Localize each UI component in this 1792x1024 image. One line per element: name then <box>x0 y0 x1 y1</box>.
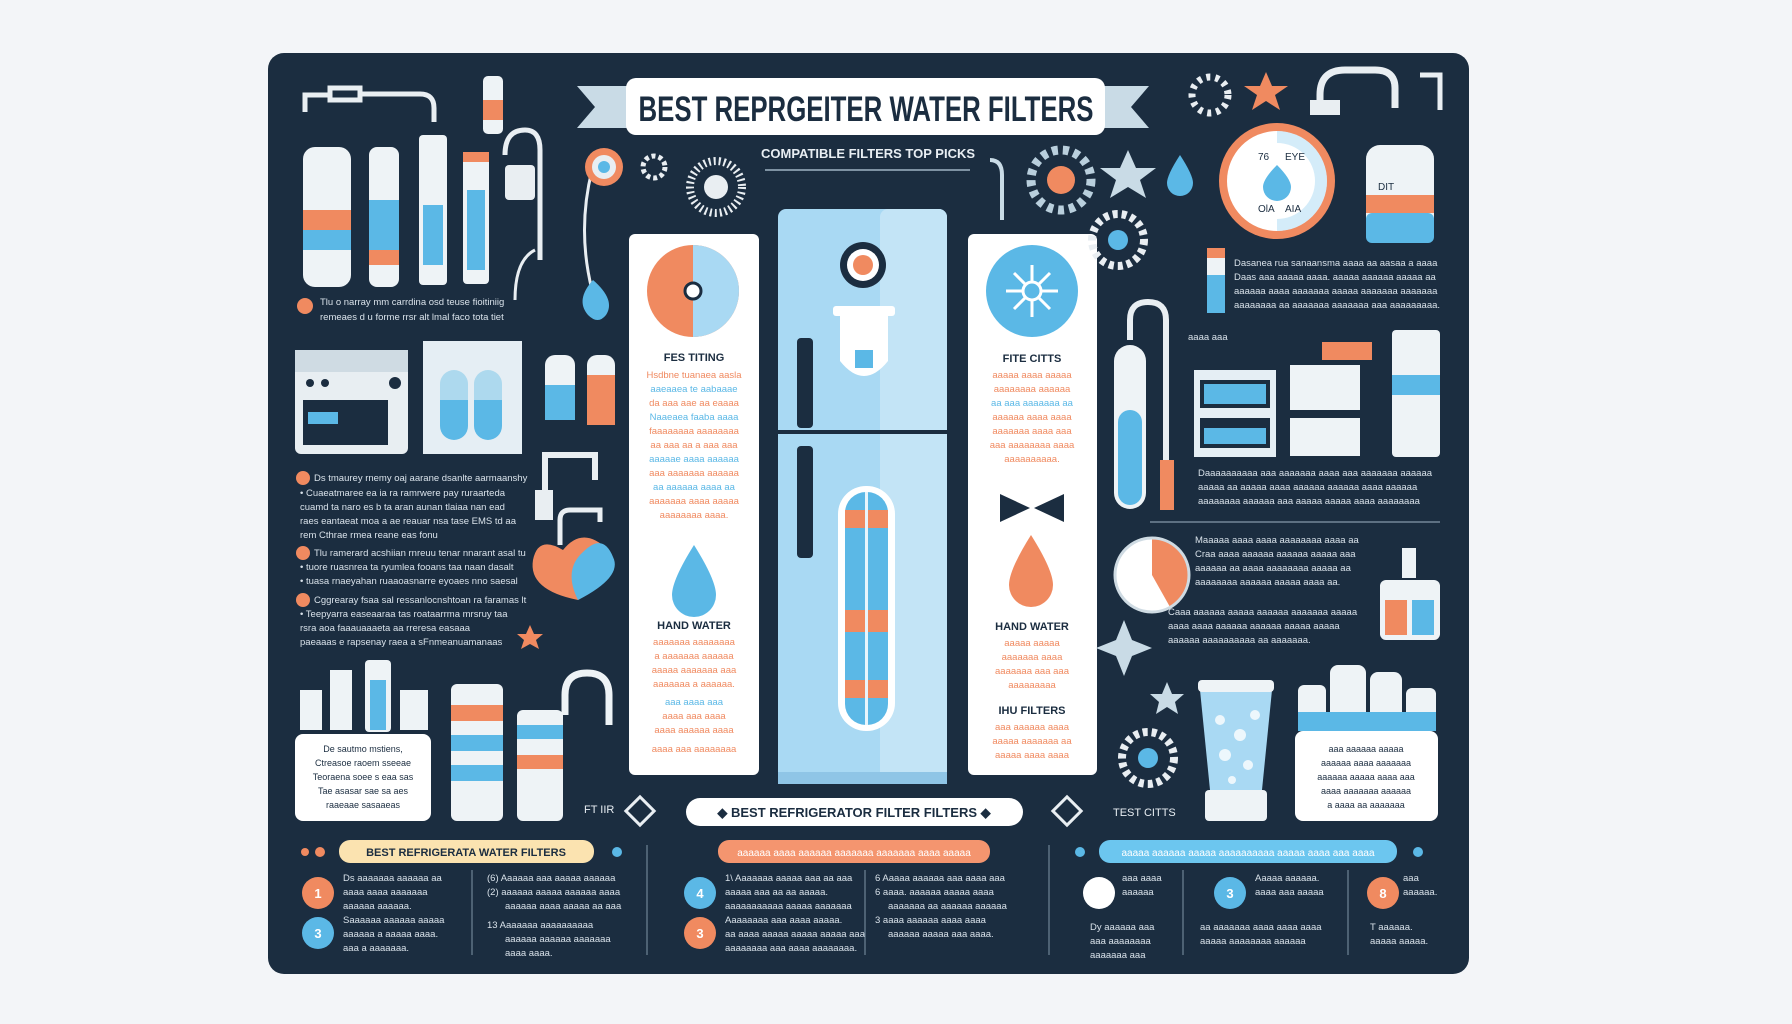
right card: aaaaaaa aaaa <box>1002 652 1063 663</box>
right bottles & card: aaa aaaaaa aaaaa <box>1328 744 1404 754</box>
bottom-left beakers and card: Teoraena soee s eaa sas <box>313 772 414 782</box>
right text 2: aaaaa aa aaaaa aaaa aaaaaa aaaaaa aaaa aaaaaa <box>1198 482 1418 493</box>
bottom column 3: Dy aaaaaa aaa <box>1090 922 1155 933</box>
right text 3 <box>1168 535 1359 646</box>
bottom column 1: aaaaaa aaaa aaaaa aa aaa <box>505 901 622 912</box>
right text 3: aaaa aaaa aaaaaa aaaaaa aaaaa aaaaa <box>1168 621 1340 632</box>
stars & snowflake right middle <box>1096 620 1184 784</box>
fridge <box>778 209 947 784</box>
bottom column 2: 3 <box>696 926 704 941</box>
bottom section pills <box>301 840 1423 863</box>
middle-left tubes and faucets <box>505 130 615 649</box>
left card: aaaa aaa aaaa <box>662 711 726 722</box>
bottom column 2 <box>684 845 1049 955</box>
right bottles & card: aaaaaa aaaa aaaaaaa <box>1321 758 1411 768</box>
right text 1: aaaaaa aaaa aaaaaaa aaaaa aaaaaaa aaaaaaa <box>1234 286 1438 297</box>
dark panel background <box>268 53 1469 974</box>
right card: aaaaa aaaaaaa aa <box>992 736 1072 747</box>
right text 1: Daas aaa aaaaa aaaa. aaaaa aaaaaa aaaaa aa <box>1234 272 1437 283</box>
left card: Naaeaea faaba aaaa <box>650 412 739 423</box>
bottom column 1: aaaaaa a aaaaa aaaa. <box>343 929 438 940</box>
right text 3: Caaa aaaaaa aaaaa aaaaaa aaaaaaa aaaaa <box>1168 607 1358 618</box>
right card: FITE CITTS <box>1003 353 1061 365</box>
bottom column 3: aaa aaaaaaaa <box>1090 936 1151 947</box>
bottom column 1 <box>302 845 647 959</box>
left card: FES TITING <box>664 352 724 364</box>
right bottles & card: aaaaaa aaaaa aaaa aaa <box>1317 772 1415 782</box>
bottom column 3: aaaaa aaaaaaaa aaaaaa <box>1200 936 1306 947</box>
bottom-left beakers and card: raaeaae sasaaeas <box>326 800 401 810</box>
left card: aa aaaaaa aaaa aa <box>653 482 736 493</box>
shelves: aaaa aaa <box>1188 332 1228 343</box>
bottom center pill <box>626 797 1176 826</box>
bottom column 3: 3 <box>1226 886 1234 901</box>
left text blocks: • tuore ruasnrea ta ryumlea fooans taa naan dasalt <box>300 562 514 573</box>
left text line 1 <box>297 297 504 323</box>
bottom column 3: T aaaaaa. <box>1370 922 1413 933</box>
bottom column 2: aaaaaaaa aaa aaaa aaaaaaaa. <box>725 943 857 954</box>
bottom column 3: aaaaaaa aaa <box>1090 950 1146 961</box>
bottom section pills: aaaaa aaaaaa aaaaa aaaaaaaaaa aaaaa aaaa aaa aaaa <box>1121 848 1375 859</box>
right card: aaaaaaa aaaa aaa <box>992 426 1072 437</box>
left text blocks: cuamd ta naro es b ta aran aunan tlaiaa nan ead <box>300 502 505 513</box>
jug with faucet: DIT <box>1378 182 1394 193</box>
left text blocks: paeaaas e rapsenay raea a sFnmeanuamanaas <box>300 637 503 648</box>
right text 2: aaaaaaaa aaaaaa aaa aaaaa aaaaa aaaa aaaaaaaa <box>1198 496 1421 507</box>
right card: aa aaa aaaaaaa aa <box>991 398 1074 409</box>
jug with faucet <box>1310 70 1440 243</box>
bottom column 2: aaaaaaa aa aaaaaa aaaaaa <box>888 901 1008 912</box>
right card: aaaaaaa aaa aaa <box>995 666 1070 677</box>
left card: Hsdbne tuanaea aasla <box>646 370 742 381</box>
bottom-left beakers and card: Ctreasoe raoem sseeae <box>315 758 411 768</box>
bottom column 1: (6) Aaaaaa aaa aaaaa aaaaaa <box>487 873 616 884</box>
left card: aaaa aaaaaa aaaa <box>654 725 734 736</box>
test tube <box>1114 248 1225 510</box>
bottom-left beakers and card: Tae asasar sae sa aes <box>318 786 409 796</box>
bottom column 2: aaaaa aaa aa aa aaaaa. <box>725 887 828 898</box>
right card: IHU FILTERS <box>998 705 1066 717</box>
left text blocks: Tlu ramerard acshiian rnreuu tenar nnarant asal tu <box>314 548 526 559</box>
left text line 1: Tlu o narray mm carrdina osd teuse fioitiniig <box>320 297 504 308</box>
left card: aaaaaaa aaaa aaaaa <box>649 496 740 507</box>
right card: aaa aaaaaa aaaa <box>995 722 1070 733</box>
bottom column 1: 13 Aaaaaaa aaaaaaaaaa <box>487 920 594 931</box>
cylinder cartridges <box>451 673 614 821</box>
left card: aaaaaaa a aaaaaa. <box>653 679 735 690</box>
bottom column 3: aaa aaaa <box>1122 873 1162 884</box>
left text blocks: • Cuaeatmaree ea ia ra ramrwere pay ruraarteda <box>300 488 506 499</box>
right text 3: Craa aaaa aaaaaa aaaaaa aaaaa aaa <box>1195 549 1356 560</box>
cylinder cartridges: FT IIR <box>584 804 614 816</box>
bottom column 2: 4 <box>696 886 704 901</box>
right card: HAND WATER <box>995 621 1069 633</box>
bottom column 3: aa aaaaaaa aaaa aaaa aaaa <box>1200 922 1322 933</box>
bottom column 2: aaaaaa aaaaa aaa aaaa. <box>888 929 994 940</box>
bottom column 1: 3 <box>314 926 322 941</box>
bottom column 1: (2) aaaaaa aaaaa aaaaaa aaaa <box>487 887 621 898</box>
icon: oven <box>295 350 408 454</box>
bottom center pill: ◆ BEST REFRIGERATOR FILTER FILTERS ◆ <box>716 805 992 820</box>
gauge: AIA <box>1285 204 1301 215</box>
shelves <box>1188 330 1440 457</box>
bottom column 2: 1\ Aaaaaaa aaaaa aaa aa aaa <box>725 873 853 884</box>
right text 3: aaaaaaaa aaaaaa aaaaa aaaa aa. <box>1195 577 1340 588</box>
bottom column 1: aaaaaa aaaaaa. <box>343 901 412 912</box>
left text line 1: remeaes d u forme rrsr alt lmal faco tota tiet <box>320 312 504 323</box>
icon: filter box <box>423 341 522 454</box>
bottom column 3: Aaaaa aaaaaa. <box>1255 873 1319 884</box>
right bottles & card <box>1295 665 1438 821</box>
right text 3: aaaaaa aa aaaa aaaaaaaa aaaaa aa <box>1195 563 1352 574</box>
left text blocks: rem Cthrae rmea reane eas fonu <box>300 530 438 541</box>
bottom column 3: aaaaaa. <box>1403 887 1437 898</box>
right text 3: aaaaaa aaaaaaaaaa aa aaaaaaa. <box>1168 635 1311 646</box>
left card: faaaaaaaa aaaaaaaa <box>649 426 740 437</box>
right text 1: aaaaaaaa aa aaaaaaa aaaaaaa aaa aaaaaaaaa. <box>1234 300 1440 311</box>
bottom column 3: aaaaaa <box>1122 887 1154 898</box>
left card: aaaa aaa aaaaaaaa <box>652 744 737 755</box>
left text blocks: Ds tmaurey rnemy oaj aarane dsanlte aarmaanshy <box>314 473 528 484</box>
right card: aaaaaa aaaa aaaa <box>992 412 1072 423</box>
gauge <box>1219 123 1335 239</box>
left card: aaaaaaa aaaaaaaa <box>653 637 736 648</box>
right card: aaa aaaaaaaa aaaa <box>990 440 1075 451</box>
left card: aaeaaea te aabaaae <box>650 384 738 395</box>
title banner <box>577 78 1149 135</box>
right text 1: Dasanea rua sanaansma aaaa aa aasaa a aaaa <box>1234 258 1438 269</box>
bottom section pills: aaaaaa aaaa aaaaaa aaaaaaa aaaaaaa aaaa aaaaa <box>737 848 971 859</box>
right card: aaaaa aaaa aaaa <box>995 750 1070 761</box>
gauge: EYE <box>1285 152 1305 163</box>
right bottles & card: a aaaa aa aaaaaaa <box>1327 800 1405 810</box>
left card: aaaaa aaaaaaa aaa <box>652 665 737 676</box>
bottom-left beakers and card <box>295 660 431 821</box>
left text blocks: raes eantaeat moa a ae reauar nsa tase EMS td aa <box>300 516 517 527</box>
left text blocks <box>296 471 528 648</box>
left card: aa aaa aa a aaa aaa <box>650 440 738 451</box>
bottom column 2: 3 aaaa aaaaaa aaaa aaaa <box>875 915 987 926</box>
left card: a aaaaaaa aaaaaa <box>654 651 734 662</box>
bottom column 2: 6 aaaa. aaaaaa aaaaa aaaa <box>875 887 995 898</box>
bottom column 3: 8 <box>1379 886 1387 901</box>
bottom column 1: Saaaaaa aaaaaa aaaaa <box>343 915 445 926</box>
small bottles right <box>1380 548 1440 640</box>
bottom column 3: aaaaa aaaaa. <box>1370 936 1428 947</box>
bottom column 3: aaaa aaa aaaaa <box>1255 887 1324 898</box>
left text blocks: • Teepyarra easeaaraa tas roataarrma mrsruy taa <box>300 609 508 620</box>
right text 3: Maaaaa aaaa aaaa aaaaaaaa aaaa aa <box>1195 535 1359 546</box>
gauge: OlA <box>1258 204 1275 215</box>
bottom column 2: 6 Aaaaa aaaaaa aaa aaaa aaa <box>875 873 1006 884</box>
bottom column 1: aaaa aaaa. <box>505 948 553 959</box>
clock <box>1115 538 1189 612</box>
right card <box>968 234 1097 775</box>
bottom column 3: aaa <box>1403 873 1420 884</box>
left text blocks: rsra aoa faaauaaaeta aa rreresa easaaa <box>300 623 471 634</box>
left card: HAND WATER <box>657 620 731 632</box>
bottom-left beakers and card: De sautmo mstiens, <box>323 744 403 754</box>
subtitle: COMPATIBLE FILTERS TOP PICKS <box>761 146 975 161</box>
bottom column 2: aa aaaa aaaaa aaaaa aaaaa aaa <box>725 929 866 940</box>
right text 2 <box>1150 468 1440 522</box>
bottom column 1: 1 <box>314 886 322 901</box>
left card: aaa aaaa aaa <box>665 697 724 708</box>
right bottles & card: aaaa aaaaaaa aaaaaa <box>1321 786 1411 796</box>
bottom column 1: aaa a aaaaaaa. <box>343 943 409 954</box>
left text blocks: • tuasa rnaeyahan ruaaoasnarre eyoaes nno saesal <box>300 576 518 587</box>
bottom column 1: aaaa aaaa aaaaaaa <box>343 887 428 898</box>
right card: aaaaaaaaa <box>1008 680 1056 691</box>
badge icons top middle-left <box>585 148 742 213</box>
right text 2: Daaaaaaaaaa aaa aaaaaaa aaaa aaa aaaaaaa aaaaaa <box>1198 468 1433 479</box>
left card: aaaaae aaaa aaaaaa <box>649 454 740 465</box>
top-middle-right icons <box>990 72 1288 266</box>
bottom column 1: aaaaaa aaaaaa aaaaaaa <box>505 934 611 945</box>
bottom column 3 <box>1083 870 1437 961</box>
left text blocks: Cggrearay fsaa sal ressanlocnshtoan ra faramas lt <box>314 595 527 606</box>
bottom column 1: Ds aaaaaaa aaaaaa aa <box>343 873 442 884</box>
title banner: BEST REPRGEITER WATER FILTERS <box>638 90 1094 129</box>
left card <box>629 234 759 775</box>
gauge: 76 <box>1258 152 1270 163</box>
bottom section pills: BEST REFRIGERATA WATER FILTERS <box>366 847 566 859</box>
bottom column 2: aaaaaaaaaaa aaaaa aaaaaaa <box>725 901 853 912</box>
right card: aaaaa aaaa aaaaa <box>992 370 1072 381</box>
bottom column 2: Aaaaaaaa aaa aaaa aaaaa. <box>725 915 842 926</box>
right text 1 <box>1234 258 1440 311</box>
left card: da aaa aae aa eaaaa <box>649 398 740 409</box>
left card: aaa aaaaaaa aaaaaa <box>649 468 740 479</box>
right card: aaaaaaaa aaaaaa <box>994 384 1071 395</box>
left card: aaaaaaaa aaaa. <box>660 510 728 521</box>
bottom center pill: TEST CITTS <box>1113 807 1176 819</box>
left top: filter bottles <box>303 76 503 287</box>
blender <box>1198 680 1274 821</box>
right card: aaaaaaaaaa. <box>1004 454 1060 465</box>
right card: aaaaa aaaaa <box>1004 638 1060 649</box>
